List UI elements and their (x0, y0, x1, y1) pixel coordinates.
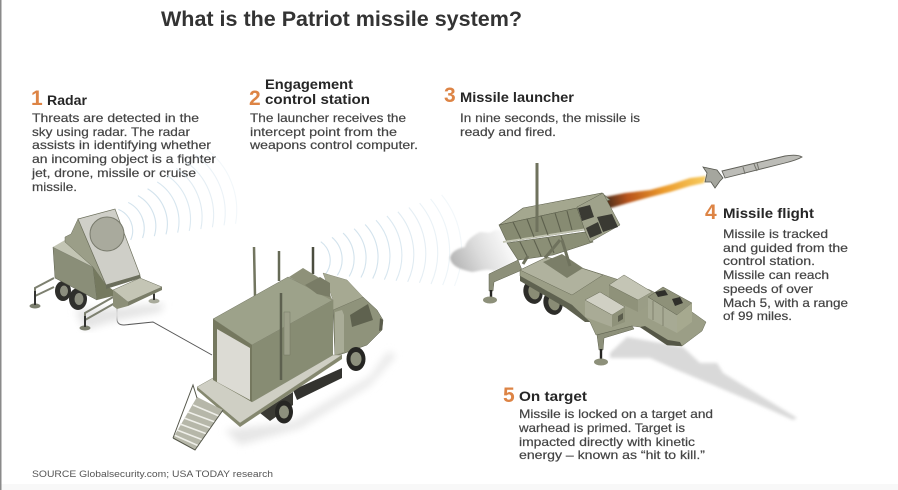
text block: step 2 engagement control station (249, 77, 418, 152)
icon: missile launcher vehicle (483, 163, 706, 366)
text block: step 2 engagement control station: The launcher receives the (250, 111, 406, 125)
truck antennas (254, 247, 313, 296)
radar table (113, 278, 162, 302)
text block: step 4 missile flight: and guided from the (723, 241, 848, 255)
text block: step 3 missile launcher (444, 84, 640, 139)
radar panel with dish (78, 209, 140, 285)
text block: step 5 on target: 5 (503, 384, 515, 407)
radar wheels (55, 281, 71, 301)
text block: step 2 engagement control station: Engagement (265, 77, 354, 92)
cable between radar and truck (117, 308, 212, 355)
launcher box left (585, 300, 612, 327)
launcher canister pack (499, 193, 610, 225)
text block: step 4 missile flight: control station. (723, 254, 815, 268)
launcher canister ends (577, 193, 620, 242)
launcher front outrigger (489, 260, 522, 291)
text block: step 5 on target: On target (519, 389, 588, 404)
text block: step 3 missile launcher: 3 (444, 84, 456, 107)
text block: step 2 engagement control station: intercept point from the (250, 125, 397, 139)
text block: step 2 engagement control station: 2 (249, 87, 261, 110)
text block: step 5 on target: impacted directly with kinetic (519, 435, 695, 449)
text block: step 4 missile flight: Missile is tracked (723, 227, 828, 241)
text block: step 1 radar: an incoming object is a fighter (32, 152, 216, 166)
icon: truck engagement control station (173, 247, 396, 450)
launcher platform (520, 257, 603, 295)
text block: step 4 missile flight: of 99 miles. (723, 309, 792, 323)
launcher box center (609, 285, 638, 312)
launcher rear outrigger (597, 326, 634, 350)
icon: missile (703, 155, 802, 188)
truck wheels (275, 400, 293, 424)
smoke cloud (450, 230, 515, 272)
radio waves from truck (317, 193, 467, 304)
launcher and missile shadow (610, 337, 797, 420)
launcher box rear with hatches (648, 297, 677, 333)
text block: step 4 missile flight: speeds of over (723, 282, 813, 296)
text block: step 3 missile launcher: In nine seconds, the missile is (460, 111, 640, 125)
text block: step 5 on target: warhead is primed. Target is (518, 421, 685, 435)
truck side antenna and tube (280, 293, 282, 380)
radar shadow (75, 303, 165, 330)
truck roof unit (289, 268, 333, 301)
text block: step 3 missile launcher: ready and fired. (460, 125, 556, 139)
text block: step 4 missile flight: 4 (705, 201, 717, 224)
text block: step 1 radar: assists in identifying whether (32, 138, 211, 152)
truck deck (197, 355, 342, 423)
text block: step 2 engagement control station: control station (265, 92, 370, 107)
flame trail (600, 176, 706, 210)
text block: step 5 on target: energy – known as “hit to kill.” (519, 448, 705, 462)
text block: step 5 on target: Missile is locked on a target and (519, 407, 713, 421)
text block: step 1 radar: Threats are detected in the (32, 111, 199, 125)
text block: step 2 engagement control station: weapons control computer. (249, 138, 418, 152)
radar body (53, 247, 97, 300)
truck chassis (293, 368, 342, 400)
text block: step 5 on target (503, 384, 713, 462)
title: What is the Patriot missile system? (161, 8, 522, 31)
launcher mast and struts (523, 163, 570, 266)
icon: radar unit (30, 209, 165, 330)
text block: step 4 missile flight: Missile flight (723, 206, 815, 221)
text block: step 1 radar: Radar (47, 93, 88, 108)
text block: step 1 radar: jet, drone, missile or cruise (31, 166, 196, 180)
truck door (217, 329, 250, 400)
radar legs (35, 278, 154, 328)
text block: step 3 missile launcher: Missile launcher (460, 90, 575, 105)
truck shadow (225, 352, 396, 445)
truck cab (333, 297, 383, 356)
text block: step 1 radar: sky using radar. The radar (32, 125, 190, 139)
launcher bed (520, 257, 706, 346)
launcher wheels (521, 278, 545, 306)
text block: step 4 missile flight (705, 201, 848, 323)
text block: step 1 radar: missile. (32, 180, 77, 194)
text block: step 1 radar (31, 87, 216, 194)
source line: SOURCE Globalsecurity.com; USA TODAY research (32, 469, 273, 480)
text block: step 4 missile flight: Mach 5, with a range (723, 296, 848, 310)
truck container (213, 277, 333, 345)
text block: step 4 missile flight: Missile can reach (723, 268, 829, 282)
truck stairs (173, 385, 223, 450)
launcher rear tread (640, 326, 682, 346)
text block: step 1 radar: 1 (31, 87, 43, 110)
radio waves from radar (109, 144, 246, 262)
